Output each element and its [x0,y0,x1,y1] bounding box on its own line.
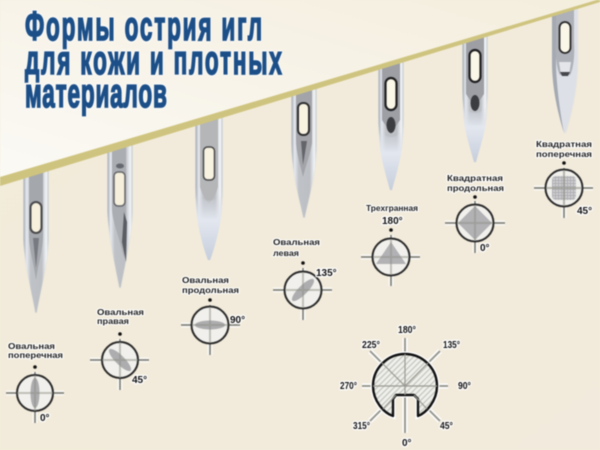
scale label: 180 degrees: 180° [398,325,416,336]
diagram: square longitudinal 0 deg [445,174,505,254]
diagram: triangular 180 deg [361,204,420,286]
diagram: square transverse 45 deg: Квадратная [536,140,592,149]
scale label: 45 degrees: 45° [440,421,453,432]
diagram: oval right 45 deg [90,308,149,390]
scale label: 315 degrees: 315° [353,421,370,432]
diagram: oval left 135 deg: Овальная [273,238,320,247]
title [25,4,282,117]
title: Формы острия игл [25,4,262,50]
diagram: oval longitudinal 90 deg [181,276,245,355]
needle 1: oval transverse [23,160,49,313]
diagram: oval right 45 deg: Овальная [97,308,144,317]
needle 6: square longitudinal [462,10,488,162]
diagram: oval transverse 0 deg [6,342,64,424]
needle 4: oval left [291,63,317,218]
diagram: square transverse 45 deg: 45° [577,206,592,217]
scale label: 270 degrees: 270° [340,381,357,392]
diagram: square longitudinal 0 deg: продольная [447,184,504,193]
diagram: square transverse 45 deg [534,140,593,218]
main cross-section diagram with angle scale [340,325,471,449]
title: материалов [25,71,167,117]
top panel with gold diagonal band [0,0,600,186]
diagram: oval right 45 deg: правая [97,317,129,326]
diagram: square longitudinal 0 deg: Квадратная [447,174,503,183]
scale label: 135 degrees: 135° [443,340,460,351]
diagram: oval longitudinal 90 deg: 90° [230,315,245,326]
diagram: oval left 135 deg [273,238,337,320]
diagram: oval transverse 0 deg: поперечная [8,351,63,360]
needle 7: square transverse [552,0,578,133]
needle 5: triangular [378,38,404,190]
scale label: 90 degrees: 90° [458,381,471,392]
scale label: 0 degrees: 0° [402,438,412,449]
diagram: oval right 45 deg: 45° [132,375,147,386]
diagram: square transverse 45 deg: поперечная [536,150,592,159]
needle 2: oval right [107,132,133,288]
diagram: square longitudinal 0 deg: 0° [480,243,490,254]
diagram: oval longitudinal 90 deg: продольная [182,286,239,295]
diagram: oval transverse 0 deg: 0° [40,413,50,424]
diagram: triangular 180 deg: 180° [382,216,403,227]
scale label: 225 degrees: 225° [362,340,380,351]
diagram: oval transverse 0 deg: Овальная [8,342,55,351]
diagram: oval left 135 deg: левая [273,249,299,258]
needle 3: oval longitudinal [195,107,223,260]
diagram: oval longitudinal 90 deg: Овальная [182,276,229,285]
diagram: oval left 135 deg: 135° [316,268,337,279]
title: для кожи и плотных [25,38,282,84]
diagram: triangular 180 deg: Трехгранная [366,204,418,213]
